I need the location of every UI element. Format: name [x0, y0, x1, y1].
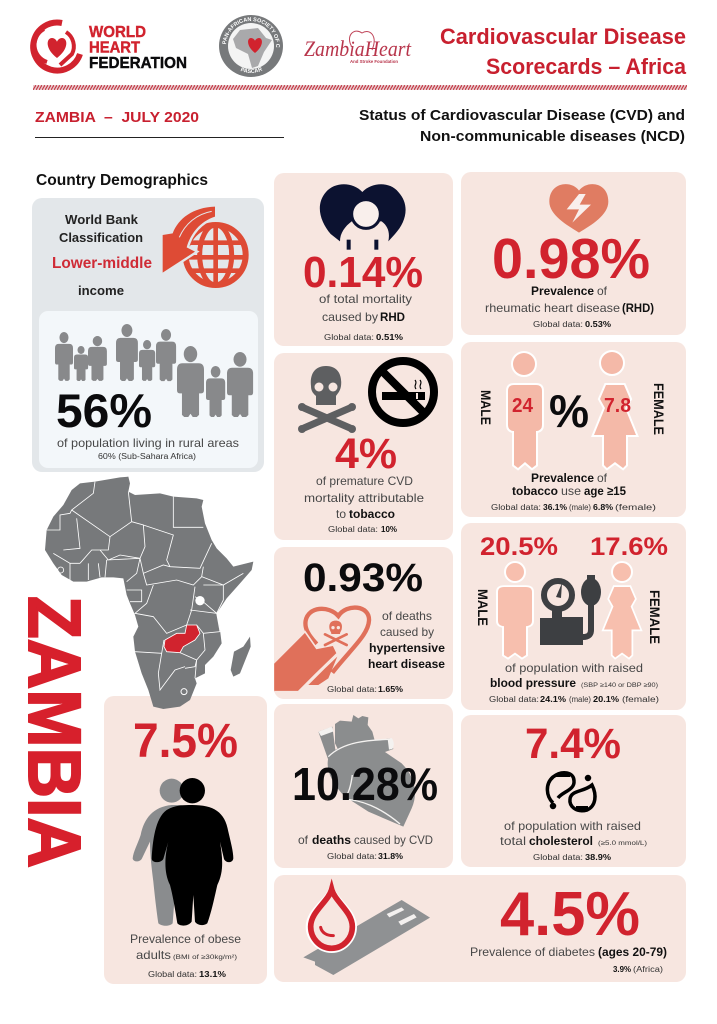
text: RHD mortality caption: of total mortality — [319, 292, 412, 306]
panel: CVD deaths — [274, 704, 453, 868]
text: hypertensive caption: of deaths — [382, 609, 432, 623]
text: cholesterol caption: of population with raised — [504, 819, 641, 833]
text: tobacco mortality caption: to — [336, 507, 346, 521]
icon: skull and crossbones — [298, 366, 356, 433]
stat: female tobacco use: 7.8 — [604, 395, 631, 417]
text: obesity caption: 13.1% — [199, 970, 226, 979]
panel: obesity — [104, 696, 267, 984]
logo: Pan-African Society of Cardiology — [219, 15, 283, 77]
panel: demographics — [32, 198, 264, 472]
text: blood pressure caption: 20.1% — [593, 695, 619, 704]
subtitle — [359, 107, 685, 145]
icon: anatomical heart — [318, 715, 415, 827]
text: diabetes caption: (ages 20-79) — [598, 945, 667, 959]
icon: broken heart — [549, 184, 608, 233]
text: world bank classification: income — [78, 284, 124, 298]
text: RHD prevalence caption: rheumatic heart disease — [485, 301, 620, 315]
icon: male figure — [508, 353, 542, 468]
text: cholesterol caption: 38.9% — [585, 853, 611, 862]
text: blood pressure caption: Global data: — [489, 695, 539, 704]
text: obesity caption: Prevalence of obese — [130, 932, 241, 946]
text: cholesterol caption: cholesterol — [529, 834, 593, 848]
icon: hand holding heart with skull — [273, 608, 369, 692]
text: RHD prevalence caption: (RHD) — [622, 301, 654, 315]
text: rural population caption — [57, 436, 239, 461]
highlighted country: Zambia — [164, 625, 200, 653]
text: tobacco use caption: (female) — [615, 503, 656, 512]
icon: obese figures — [133, 778, 233, 926]
text: blood pressure caption — [489, 661, 659, 704]
text: diabetes caption: Prevalence of diabetes — [470, 945, 595, 959]
text: tobacco use caption — [491, 471, 656, 512]
text: RHD prevalence caption: Prevalence — [531, 284, 594, 298]
text: tobacco use caption: tobacco — [512, 484, 558, 498]
icon: three families — [55, 324, 253, 417]
text: RHD mortality caption — [319, 292, 412, 342]
panel: RHD prevalence — [461, 172, 686, 335]
text: cholesterol caption — [500, 819, 647, 862]
heading: country demographics: Country Demographics — [36, 172, 208, 189]
logo: World Heart Federation: FEDERATION — [89, 55, 187, 72]
icon: cholesterol drops — [547, 773, 595, 811]
text: cholesterol caption: (≥5.0 mmol/L) — [598, 840, 647, 847]
text: CVD deaths caption: deaths — [312, 833, 351, 847]
logo: World Heart Federation: WORLD — [89, 24, 146, 41]
text: diabetes caption: 3.9% — [613, 965, 631, 974]
label: male: MALE — [475, 589, 491, 626]
text: cholesterol caption: total — [500, 834, 526, 848]
icon: blood pressure monitor — [540, 575, 601, 645]
stat: CVD deaths: 10.28% — [292, 758, 438, 810]
text: obesity caption — [130, 932, 241, 979]
inner panel: rural population — [39, 311, 258, 468]
country name: Zambia: ZAMBIA — [13, 596, 96, 868]
text: blood pressure caption: blood pressure — [490, 676, 576, 690]
icon: globe with down arrow — [163, 207, 246, 287]
text: tobacco mortality caption — [304, 474, 424, 534]
text: blood pressure caption: of population with raised — [505, 661, 643, 675]
title: Scorecards – Africa — [486, 54, 687, 79]
text: tobacco use caption: (male) — [569, 503, 591, 512]
text: RHD mortality caption: caused by — [322, 310, 378, 324]
subtitle: Status of Cardiovascular Disease (CVD) and — [359, 107, 685, 124]
text: hypertensive caption — [327, 609, 445, 694]
text: diabetes caption: (Africa) — [633, 965, 663, 974]
text: tobacco use caption: Prevalence — [531, 471, 594, 485]
text: rural population caption: 60% (Sub-Sahara Africa) — [98, 452, 196, 461]
logo: World Heart Federation: HEART — [89, 40, 141, 56]
panel: tobacco mortality — [274, 353, 453, 540]
text: tobacco use caption: age ≥15 — [584, 484, 626, 498]
text: hypertensive caption: 1.65% — [378, 685, 403, 694]
text: blood pressure caption: (female) — [622, 695, 659, 704]
text: blood pressure caption: (SBP ≥140 or DBP ≥90) — [581, 682, 658, 689]
subtitle: Non-communicable diseases (NCD) — [420, 128, 685, 145]
text: tobacco use caption: use — [561, 484, 581, 498]
stat: male tobacco use: 24 — [512, 395, 534, 417]
text: CVD deaths caption: caused by CVD — [354, 833, 433, 847]
text: CVD deaths caption: Global data: — [327, 852, 377, 861]
text: RHD prevalence caption: of — [597, 284, 608, 298]
stat: obesity: 7.5% — [133, 715, 238, 768]
text: tobacco use caption: 6.8% — [593, 503, 613, 512]
text: tobacco mortality caption: mortality attributable — [304, 491, 424, 505]
label: female: FEMALE — [651, 383, 667, 435]
panel: blood pressure — [461, 523, 686, 710]
text: CVD deaths caption: of — [298, 833, 309, 847]
text: hypertensive caption: Global data: — [327, 685, 377, 694]
text: CVD deaths caption — [298, 833, 433, 861]
text: diabetes caption — [470, 945, 667, 974]
stat: diabetes: 4.5% — [500, 880, 640, 949]
map: Africa with Zambia highlighted — [45, 477, 253, 709]
text: hypertensive caption: hypertensive — [369, 641, 445, 655]
stat: female blood pressure: 17.6% — [590, 533, 668, 561]
text: RHD mortality caption: 0.51% — [376, 333, 403, 342]
icon: female figure — [594, 352, 636, 468]
panel: RHD mortality — [274, 173, 453, 346]
text: blood pressure caption: 24.1% — [540, 695, 566, 704]
text: obesity caption: Global data: — [148, 970, 197, 979]
text: world bank classification: Lower-middle — [52, 255, 152, 272]
stat: RHD mortality: 0.14% — [303, 248, 423, 297]
text: world bank classification: World Bank — [65, 213, 138, 227]
stat: tobacco mortality: 4% — [335, 430, 397, 478]
panel: tobacco use — [461, 342, 686, 517]
text: tobacco use caption: Global data: — [491, 503, 541, 512]
stat: hypertensive heart disease: 0.93% — [303, 556, 423, 600]
icon: no smoking — [372, 361, 434, 423]
text: tobacco mortality caption: 10% — [381, 525, 397, 534]
text: RHD mortality caption: Global data: — [324, 333, 374, 342]
stat: RHD prevalence: 0.98% — [492, 227, 650, 291]
text: tobacco mortality caption: of premature CVD — [316, 474, 413, 488]
text: RHD mortality caption: RHD — [380, 310, 405, 324]
text: tobacco use caption: 36.1% — [543, 503, 567, 512]
text: hypertensive caption: heart disease — [368, 657, 445, 671]
panel: hypertensive heart disease — [273, 547, 453, 699]
label: female: FEMALE — [647, 590, 663, 644]
text: cholesterol caption: Global data: — [533, 853, 583, 862]
panel: cholesterol — [461, 715, 686, 867]
text: tobacco mortality caption: Global data: — [328, 525, 378, 534]
text: CVD deaths caption: 31.8% — [378, 852, 403, 861]
text: obesity caption: adults — [136, 948, 171, 962]
text: hypertensive caption: caused by — [380, 625, 434, 639]
text: world bank classification: Classification — [59, 231, 143, 245]
icon: male figure — [498, 563, 532, 658]
title — [440, 24, 687, 79]
logo: Zambia Heart and Stroke Foundation: ZambiaHeart — [304, 36, 412, 61]
text: RHD prevalence caption — [485, 284, 654, 329]
label: male: MALE — [478, 390, 494, 425]
logo: Zambia Heart and Stroke Foundation: And Stroke Foundation — [350, 59, 398, 64]
title: Cardiovascular Disease — [440, 24, 686, 49]
icon: female figure — [604, 563, 640, 658]
panel: diabetes — [274, 875, 686, 982]
text: tobacco mortality caption: tobacco — [349, 507, 395, 521]
text: tobacco use caption: of — [597, 471, 608, 485]
logo: World Heart Federation — [33, 23, 187, 72]
text: world bank classification — [52, 213, 152, 298]
text: RHD prevalence caption: 0.53% — [585, 320, 611, 329]
icon: test strip and blood drop — [303, 887, 430, 975]
stat: cholesterol: 7.4% — [525, 720, 621, 768]
percent sign: % — [549, 385, 589, 437]
logo: Pan-African Society of Cardiology: PASCAR — [240, 67, 262, 73]
stat: male blood pressure: 20.5% — [480, 533, 558, 561]
text: rural population caption: of population living in rural areas — [57, 436, 239, 450]
text: obesity caption: (BMI of ≥30kg/m²) — [173, 954, 237, 961]
text: RHD prevalence caption: Global data: — [533, 320, 583, 329]
text: blood pressure caption: (male) — [569, 695, 591, 704]
heading: country and date: ZAMBIA – JULY 2020 — [35, 109, 199, 126]
icon: dark heart with ring — [320, 184, 406, 250]
stat: rural population: 56% — [56, 384, 152, 437]
